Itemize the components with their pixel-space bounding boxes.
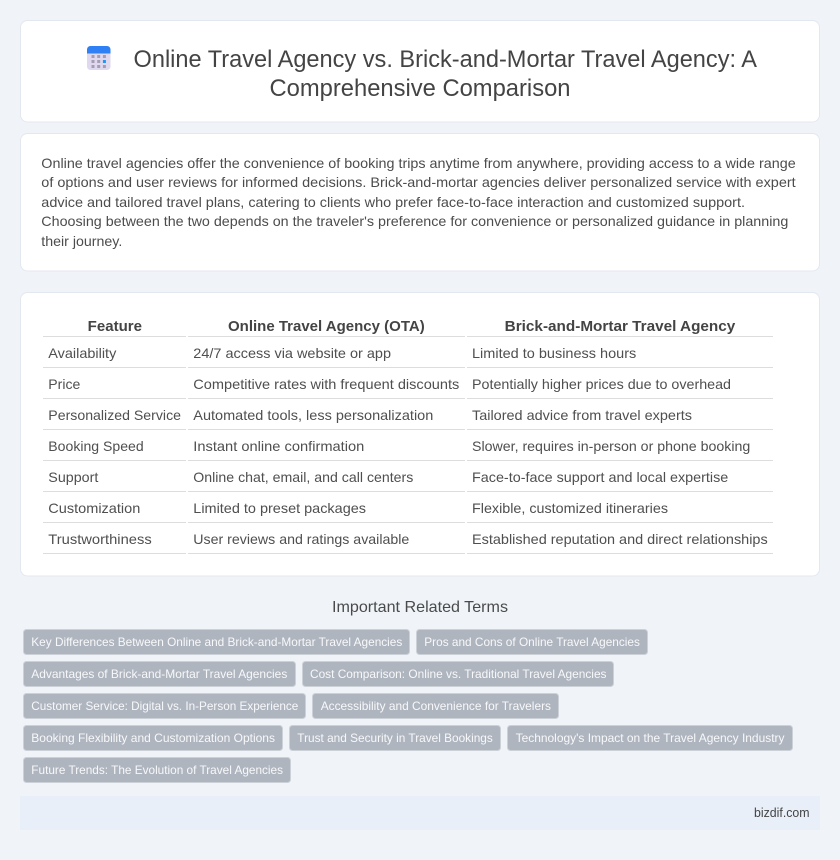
table row: support: Support (48, 469, 98, 485)
table row: personalized service (43, 407, 773, 430)
table header row (43, 318, 773, 337)
tag (508, 726, 792, 750)
tag (24, 758, 290, 782)
tag (24, 694, 306, 718)
table row: availability (43, 345, 773, 368)
tag (416, 630, 648, 654)
panel: introduction text: advice and tailored travel plans, catering to clients who prefer face-to-face interaction and customized support. (41, 194, 745, 210)
table row: availability: Availability (48, 345, 116, 361)
table header row: Brick-and-Mortar Travel Agency (505, 318, 736, 335)
table row: personalized service: Tailored advice from travel experts (472, 407, 692, 423)
tag (24, 662, 296, 686)
tag (290, 726, 500, 750)
table row: booking speed: Instant online confirmation (193, 438, 364, 454)
tag: Future Trends: The Evolution of Travel Agencies (31, 763, 283, 777)
tag: Booking Flexibility and Customization Options (31, 731, 275, 745)
tag: Accessibility and Convenience for Travelers (321, 699, 551, 713)
table row: trustworthiness: User reviews and ratings available (193, 531, 410, 547)
panel: introduction text: their journey. (41, 233, 122, 249)
title: Online Travel Agency vs. Brick-and-Mortar Travel Agency: A (134, 46, 757, 73)
footer bar (20, 796, 820, 830)
tag: Key Differences Between Online and Brick-and-Mortar Travel Agencies (31, 635, 402, 649)
table row: support: Face-to-face support and local expertise (472, 469, 729, 485)
table row: customization: Limited to preset packages (193, 500, 366, 516)
table row: booking speed: Booking Speed (48, 438, 144, 454)
table row: price: Price (48, 376, 81, 392)
tag: Advantages of Brick-and-Mortar Travel Agencies (31, 667, 287, 681)
table row: personalized service: Personalized Service (48, 407, 181, 423)
table row: support: Online chat, email, and call centers (193, 469, 413, 485)
tag: Cost Comparison: Online vs. Traditional Travel Agencies (310, 667, 606, 681)
tag (24, 630, 410, 654)
tag: Customer Service: Digital vs. In-Person Experience (31, 699, 299, 713)
tag: Trust and Security in Travel Bookings (297, 731, 493, 745)
title: Comprehensive Comparison (270, 75, 570, 102)
table row: price (43, 376, 773, 399)
title (134, 46, 757, 102)
tag: Technology's Impact on the Travel Agency Industry (516, 731, 784, 745)
tag (302, 662, 614, 686)
panel: introduction text (20, 134, 820, 271)
panel: related term tags (24, 630, 792, 782)
table row: price: Competitive rates with frequent discounts (193, 376, 459, 392)
table row: customization: Customization (48, 500, 140, 516)
table row: availability: 24/7 access via website or app (193, 345, 391, 361)
table row: trustworthiness: Trustworthiness (48, 531, 152, 547)
table row: trustworthiness: Established reputation and direct relationships (472, 531, 768, 547)
table row: customization (43, 500, 773, 523)
tag (24, 726, 282, 750)
table row: customization: Flexible, customized itineraries (472, 500, 668, 516)
panel: introduction text: of options and user reviews for informed decisions. Brick-and-mortar agencies deliver personalized service with expert (41, 174, 796, 190)
table header row: Feature (88, 318, 142, 335)
tag (312, 694, 558, 718)
icon: calendar (87, 46, 110, 70)
table header row: Online Travel Agency (OTA) (228, 318, 425, 335)
table row: booking speed: Slower, requires in-person or phone booking (472, 438, 750, 454)
tag: Pros and Cons of Online Travel Agencies (424, 635, 640, 649)
panel: introduction text: Choosing between the two depends on the traveler's preference for convenience or personalized guidance in planning (41, 213, 788, 229)
panel: comparison table (20, 292, 820, 576)
panel: title header (20, 20, 820, 122)
table row: trustworthiness (43, 531, 773, 554)
table row: support (43, 469, 773, 492)
table row: price: Potentially higher prices due to overhead (472, 376, 731, 392)
table row: personalized service: Automated tools, less personalization (193, 407, 433, 423)
heading: important related terms: Important Related Terms (332, 599, 508, 616)
footer bar: bizdif.com (754, 806, 810, 820)
panel: introduction text: Online travel agencies offer the convenience of booking trips anytime from anywhere, providing access to a wide range (41, 155, 796, 171)
table row: availability: Limited to business hours (472, 345, 636, 361)
table row: booking speed (43, 438, 773, 461)
